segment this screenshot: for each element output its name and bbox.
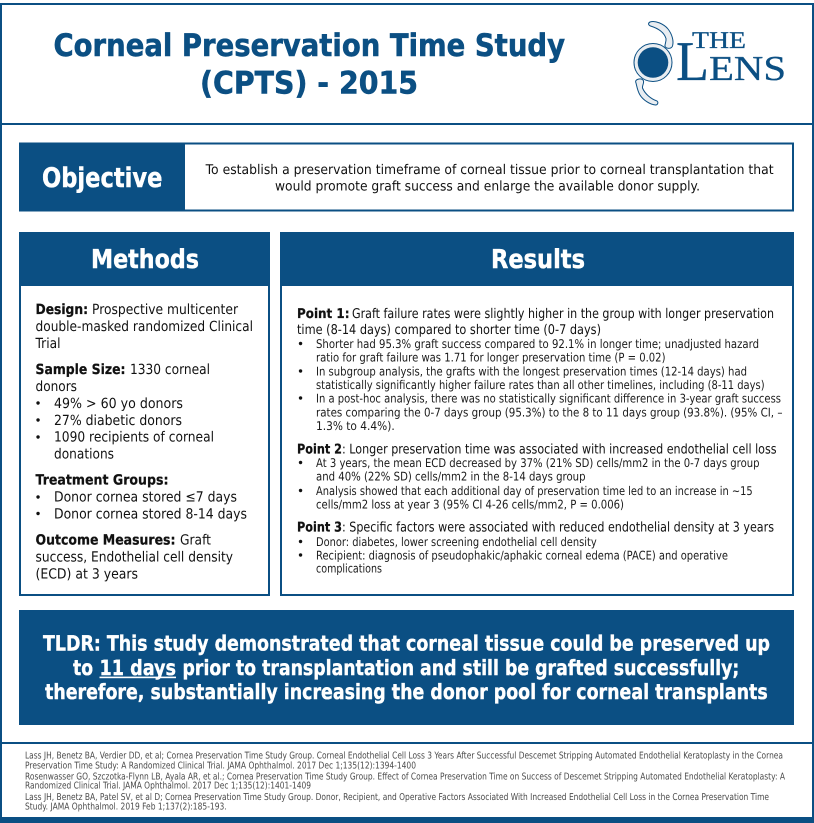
- point 2: and 40% (22% SD) cells/mm2 in the 8-14 days group: [316, 470, 586, 484]
- point 3: Donor: diabetes, lower screening endothelial cell density: [316, 535, 597, 549]
- logo: The Lens: ENS: [709, 49, 786, 88]
- title: [54, 28, 565, 102]
- point 3: Point 3: [297, 521, 342, 536]
- outcome measures: (ECD) at 3 years: [36, 566, 138, 582]
- panel: objective: would promote graft success and enlarge the available donor supply.: [275, 180, 700, 195]
- sample size: •: [34, 430, 42, 444]
- panel: objective: [19, 142, 793, 212]
- point 3: [297, 521, 774, 576]
- point 1: •: [297, 365, 304, 379]
- design: Design:: [36, 302, 88, 318]
- callout: TLDR: 11 days: [100, 656, 176, 680]
- logo: The Lens: [634, 21, 786, 105]
- logo: The Lens: L: [676, 31, 709, 93]
- panel: results: Results: [491, 245, 585, 275]
- sample size: donors: [36, 379, 77, 395]
- design: double-masked randomized Clinical: [36, 319, 253, 335]
- treatment groups: Donor cornea stored ≤7 days: [54, 490, 237, 506]
- point 3: •: [297, 535, 304, 549]
- sample size: 27% diabetic donors: [54, 413, 182, 429]
- point 2: [297, 442, 777, 511]
- panel: methods: [19, 232, 270, 595]
- outcome measures: Outcome Measures:: [36, 532, 176, 548]
- point 2: cells/mm2 loss at year 3 (95% CI 4-26 cells/mm2, P = 0.006): [316, 497, 624, 511]
- point 3: Recipient: diagnosis of pseudophakic/aphakic corneal edema (PACE) and operative: [316, 548, 728, 562]
- sample size: Sample Size:: [36, 362, 126, 378]
- point 1: 1.3% to 4.4%).: [316, 419, 395, 433]
- title: (CPTS) - 2015: [200, 66, 418, 102]
- sample size: 1090 recipients of corneal: [54, 430, 214, 446]
- design: Trial: [35, 336, 60, 352]
- treatment groups: •: [34, 490, 42, 504]
- outcome measures: success, Endothelial cell density: [36, 549, 233, 565]
- point 1: •: [297, 337, 304, 351]
- point 2: Point 2: [297, 442, 342, 457]
- panel: methods: Methods: [91, 245, 199, 275]
- point 1: time (8-14 days) compared to shorter time (0-7 days): [297, 323, 601, 338]
- references: [25, 751, 785, 812]
- treatment groups: Treatment Groups:: [36, 473, 168, 489]
- sample size: •: [34, 396, 42, 410]
- point 1: •: [297, 392, 304, 406]
- panel: results: [280, 232, 794, 595]
- references: Randomized Clinical Trial. JAMA Ophthalmol. 2017 Dec 1;135(12):1401-1409: [25, 781, 311, 792]
- point 1: Point 1:: [297, 307, 350, 322]
- treatment groups: Donor cornea stored 8-14 days: [54, 506, 247, 522]
- treatment groups: •: [34, 507, 42, 521]
- sample size: 49% > 60 yo donors: [54, 396, 183, 412]
- sample size: [34, 362, 214, 462]
- sample size: 1330 corneal: [130, 362, 210, 378]
- panel: objective: Objective: [42, 163, 162, 194]
- design: Prospective multicenter: [92, 302, 238, 318]
- references: Preservation Time Study: A Randomized Clinical Trial. JAMA Ophthalmol. 2017 Dec 1;135(12):1394-1400: [25, 761, 416, 772]
- sample size: •: [34, 414, 42, 428]
- point 1: ratio for graft failure was 1.71 for longer preservation time (P = 0.02): [316, 350, 666, 364]
- sample size: donations: [54, 446, 114, 462]
- point 3: •: [297, 548, 304, 562]
- panel: objective: To establish a preservation timeframe of corneal tissue prior to corneal transplantation that: [205, 163, 774, 178]
- design: [35, 302, 253, 352]
- outcome measures: Graft: [180, 532, 211, 548]
- point 1: [297, 307, 782, 433]
- callout: TLDR: to: [73, 656, 93, 680]
- outcome measures: [36, 532, 233, 582]
- references: Study. JAMA Ophthalmol. 2019 Feb 1;137(2):185-193.: [25, 801, 227, 812]
- logo: The Lens: THE: [692, 28, 746, 54]
- title: Corneal Preservation Time Study: [54, 28, 565, 64]
- point 2: •: [297, 484, 304, 498]
- treatment groups: [34, 473, 247, 522]
- callout: TLDR: [19, 610, 794, 725]
- point 2: •: [297, 456, 304, 470]
- point 3: complications: [316, 562, 382, 576]
